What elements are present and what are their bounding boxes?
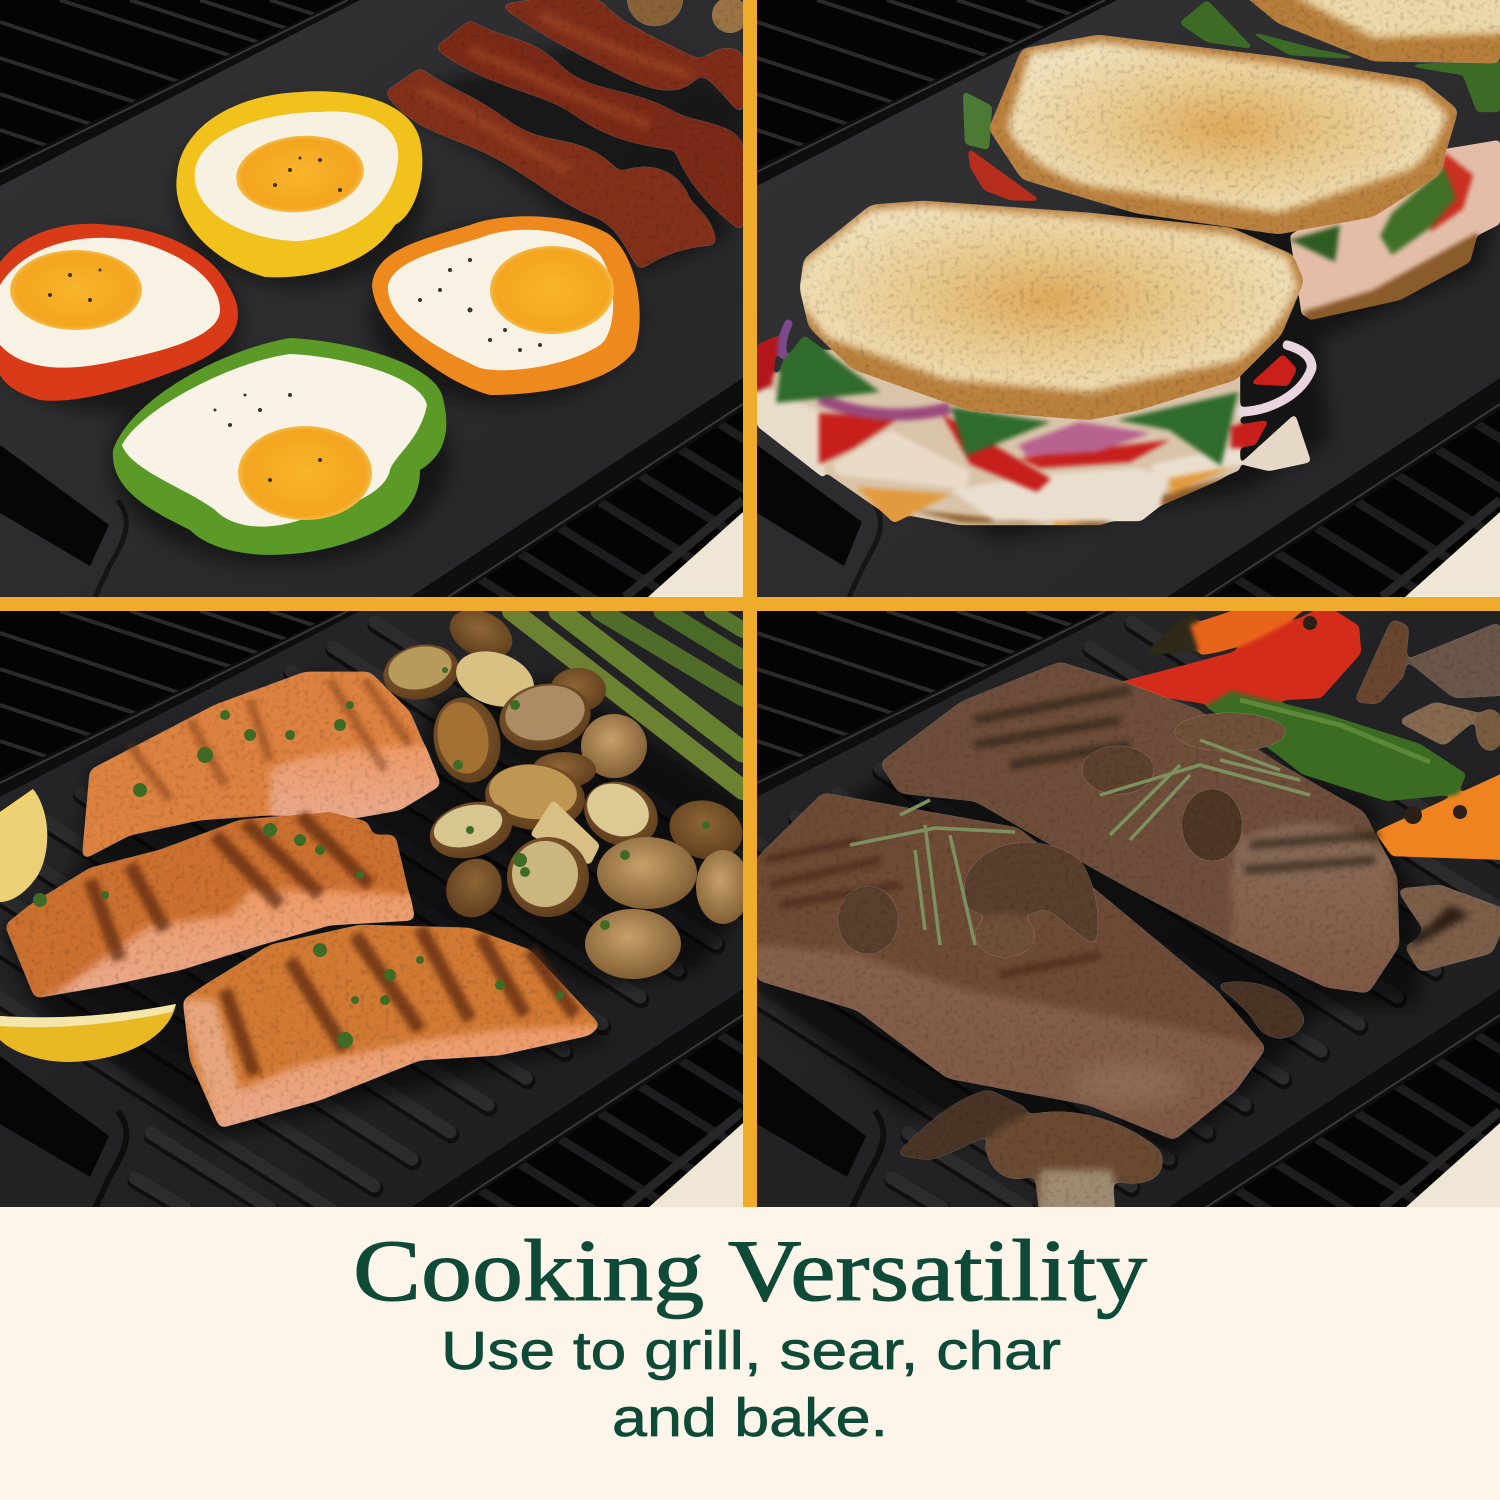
- fillet middle: [5, 812, 415, 998]
- lemon wedges: [0, 789, 176, 1062]
- panel: grilled steaks, peppers, mushrooms: [757, 605, 1500, 1216]
- fillet top: [82, 672, 441, 860]
- egg in green pepper: [113, 338, 446, 555]
- pepper specks: [48, 156, 542, 482]
- front sandwich: [757, 201, 1312, 525]
- steaks: [757, 662, 1399, 1140]
- panel: toasted sandwiches: [757, 0, 1500, 604]
- back steak: [880, 662, 1399, 993]
- fillet front: [183, 925, 600, 1128]
- salmon fillets: [5, 672, 600, 1128]
- rosemary sprigs: [850, 740, 1310, 945]
- subheading: line two: and bake.: [612, 1388, 888, 1448]
- parsley: [33, 701, 564, 1048]
- panel: eggs in peppers and bacon: [0, 0, 800, 604]
- asparagus: [512, 611, 743, 790]
- heading: Cooking Versatility: Cooking Versatility: [353, 1223, 1147, 1320]
- egg in red pepper: [0, 224, 238, 401]
- roasted peppers: [1117, 605, 1500, 860]
- front steak: [757, 793, 1266, 1140]
- bacon strips: [385, 0, 748, 270]
- parsley on potatoes: [442, 667, 710, 930]
- subheading: line one: Use to grill, sear, char: [441, 1321, 1061, 1381]
- sauteed mushrooms: [896, 619, 1500, 1215]
- back sandwich: [963, 0, 1500, 320]
- panel: grilled salmon, potatoes, asparagus: [0, 611, 743, 1207]
- mushrooms on steaks: [838, 713, 1286, 957]
- roasted potatoes: [378, 600, 750, 979]
- egg in orange pepper: [372, 216, 640, 395]
- egg in yellow pepper: [176, 91, 422, 277]
